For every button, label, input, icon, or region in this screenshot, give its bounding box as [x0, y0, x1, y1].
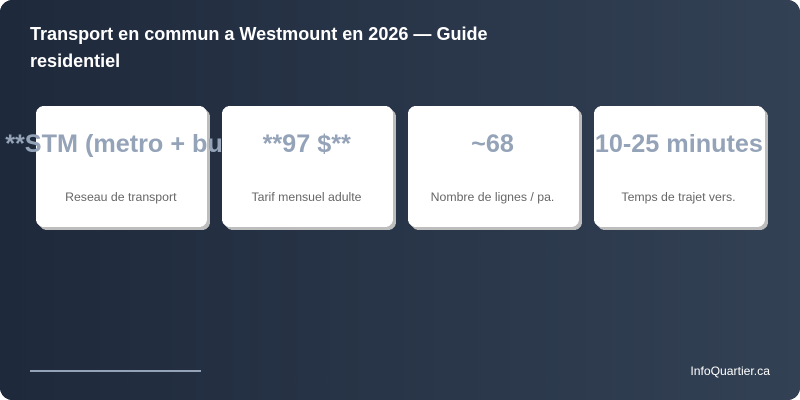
- panel: reseau de transport: [5, 106, 237, 230]
- panel: temps de trajet: Temps de trajet vers.: [621, 190, 736, 204]
- footer source: InfoQuartier.ca: [690, 364, 770, 378]
- panel: tarif mensuel: **97 $**: [263, 130, 351, 158]
- title: residentiel: [30, 51, 120, 71]
- title: [30, 24, 488, 71]
- panel: nombre de lignes: Nombre de lignes / pa.: [431, 190, 554, 204]
- panel: tarif mensuel: Tarif mensuel adulte: [251, 190, 362, 204]
- panel: reseau de transport: **STM (metro + bus: [5, 130, 237, 158]
- panel: nombre de lignes: [408, 106, 582, 230]
- title: Transport en commun a Westmount en 2026 — Guide: [30, 24, 488, 44]
- footer accent line: [30, 370, 201, 372]
- panel: reseau de transport: Reseau de transport: [65, 190, 177, 204]
- panel: tarif mensuel: [222, 106, 396, 230]
- panel: temps de trajet: [594, 106, 768, 230]
- panel: nombre de lignes: ~68: [471, 130, 514, 158]
- panel: temps de trajet: 10-25 minutes: [595, 130, 763, 158]
